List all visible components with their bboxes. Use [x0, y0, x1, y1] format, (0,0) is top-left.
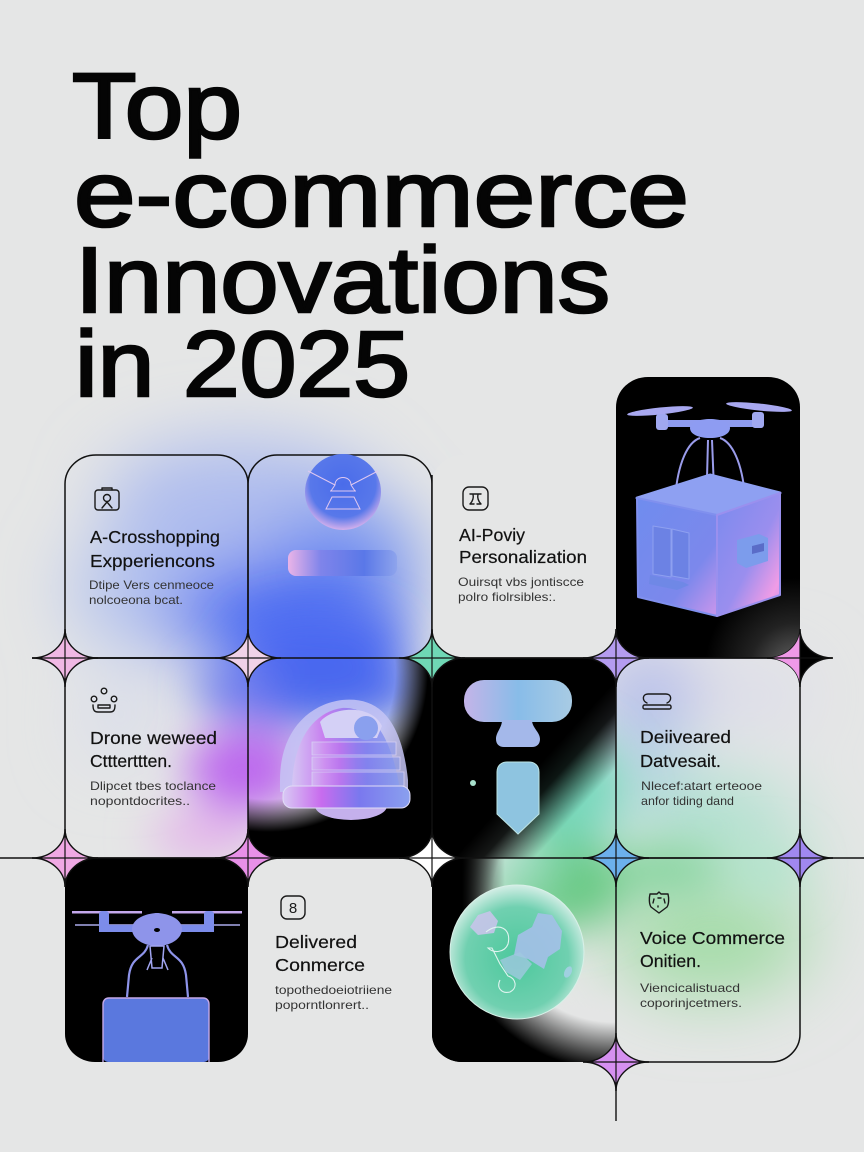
star: pink lower left	[32, 829, 98, 887]
heading: Personalization	[459, 547, 587, 567]
star: pink	[32, 629, 98, 687]
description	[458, 575, 584, 604]
title	[72, 54, 689, 416]
description	[90, 779, 216, 808]
description: Nlecef:atart erteooe	[641, 779, 762, 793]
illustration: glass shield	[497, 762, 539, 834]
heading: A-Crosshopping	[90, 527, 220, 547]
star: magenta and black	[767, 629, 833, 687]
heading: Cttterttten.	[90, 751, 172, 771]
title: in 2025	[75, 312, 410, 416]
heading	[640, 928, 785, 971]
illustration: glass helmet	[280, 700, 410, 820]
panel: delivered dataset text	[616, 658, 800, 858]
icon: voice shield	[649, 892, 669, 913]
star: magenta	[215, 829, 281, 887]
heading	[275, 932, 365, 975]
title: e-commerce	[74, 142, 689, 246]
description: Dlipcet tbes toclance	[90, 779, 216, 793]
icon: rounded square glyph	[463, 487, 488, 510]
heading: Conmerce	[275, 955, 365, 975]
illustration: glass T shape	[464, 680, 572, 747]
description	[275, 983, 392, 1012]
heading	[459, 525, 587, 567]
dot	[470, 780, 476, 786]
description: polro fiolrsibles:.	[458, 590, 556, 604]
panel: helmet illustration	[248, 658, 432, 858]
panel: AI shopping experiences text	[65, 455, 248, 658]
heading: Drone weweed	[90, 728, 217, 748]
description: nopontdocrites..	[90, 794, 190, 808]
heading: Datvesait.	[640, 751, 721, 771]
heading: Onitien.	[640, 951, 701, 971]
star: orchid bottom	[583, 1033, 649, 1091]
heading	[640, 727, 731, 771]
platform	[288, 550, 397, 576]
panel: bottom drone illustration	[65, 858, 248, 1062]
panel: AI personalization text	[432, 455, 616, 658]
heading: Voice Commerce	[640, 928, 785, 948]
panel: delivered commerce text	[248, 858, 432, 1062]
panel: voice commerce text	[616, 858, 800, 1062]
icon: camera person	[95, 488, 119, 510]
description	[641, 779, 762, 808]
heading: AI-Poviy	[459, 525, 525, 545]
heading	[90, 728, 217, 771]
star: blue	[583, 829, 649, 887]
icon: pill tray	[643, 694, 671, 709]
title: Innovations	[75, 228, 610, 332]
grid lines and four-point star connectors	[0, 629, 864, 1121]
description: topothedoeiotriiene	[275, 983, 392, 997]
illustration: drone	[627, 400, 792, 514]
star: violet	[767, 829, 833, 887]
heading: Delivered	[275, 932, 357, 952]
icon: number eight badge: 8	[289, 900, 297, 917]
title: Top	[72, 54, 242, 158]
icon: sphere with drone	[305, 454, 381, 530]
description: poporntlonrert..	[275, 998, 369, 1012]
panel: globe illustration	[432, 858, 616, 1062]
panel: T and shield illustration	[432, 658, 616, 858]
heading: Expperiencons	[90, 551, 215, 571]
heading: Deiiveared	[640, 727, 731, 747]
description: Ouirsqt vbs jontiscce	[458, 575, 584, 589]
description: nolcoeona bcat.	[89, 593, 183, 607]
panel: drone weweed text	[65, 658, 248, 858]
heading	[90, 527, 220, 571]
star: purple	[583, 629, 649, 687]
description: Viencicalistuacd	[640, 981, 740, 995]
description: Dtipe Vers cenmeoce	[89, 578, 214, 592]
description: coporinjcetmers.	[640, 996, 742, 1010]
description: anfor tiding dand	[641, 794, 734, 808]
panel: drone carrying cube	[616, 377, 800, 658]
star: white	[399, 829, 465, 887]
icon: number eight badge	[281, 896, 305, 919]
panel: floating sphere illustration	[248, 454, 432, 658]
cross strokes over stars	[32, 629, 833, 1091]
illustration: drone with box	[72, 911, 242, 1062]
description	[640, 981, 742, 1010]
description	[89, 578, 214, 607]
star: teal	[399, 629, 465, 687]
icon: three dots bot	[91, 688, 117, 712]
star: pale pink	[215, 629, 281, 687]
illustration: glass globe	[450, 885, 584, 1019]
illustration: cube	[637, 475, 780, 616]
